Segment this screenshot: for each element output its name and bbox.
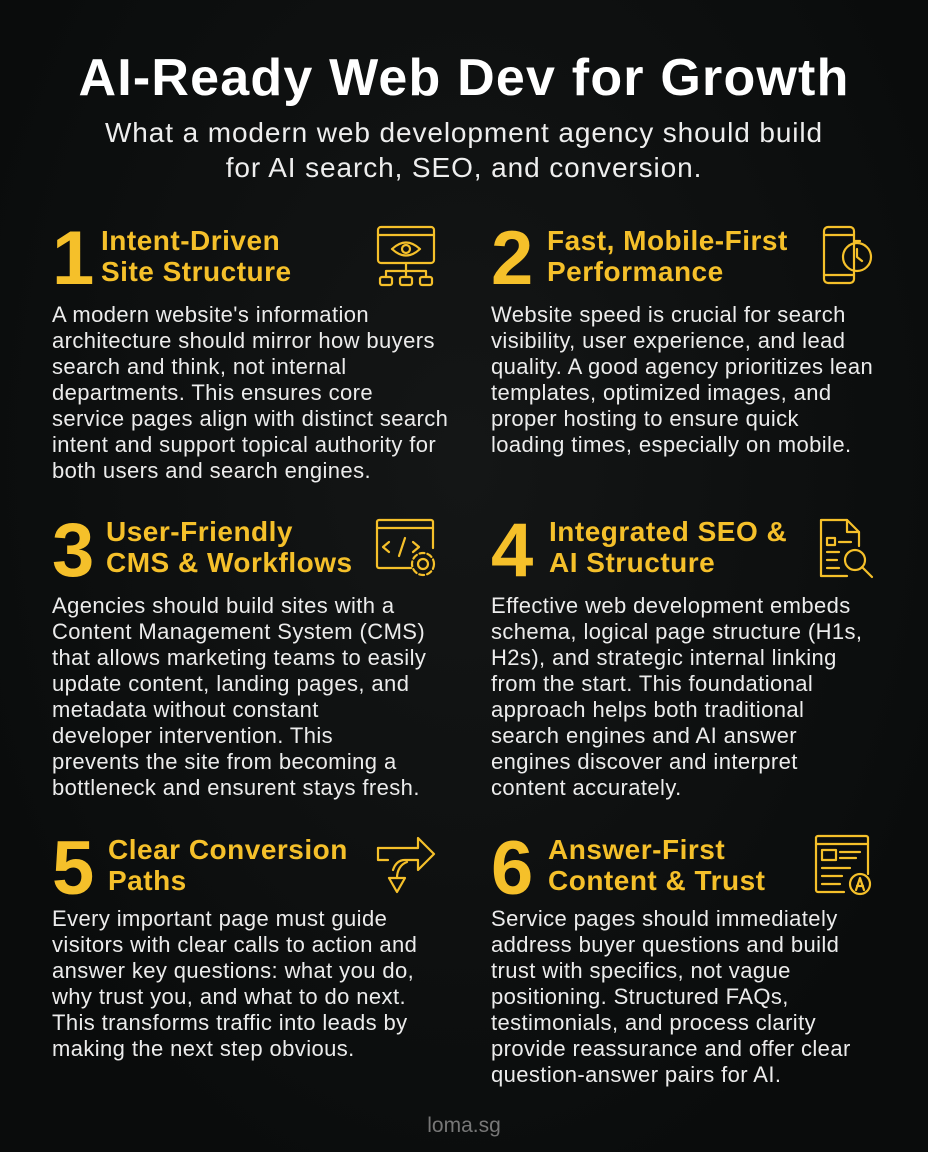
body 3: Content Management System (CMS) [52,619,425,644]
body 5: answer key questions: what you do, [52,958,414,983]
heading 6: Answer-First [548,834,725,865]
body 5: Every important page must guide [52,906,387,931]
body 4: from the start. This foundational [491,671,813,696]
body 6: positioning. Structured FAQs, [491,984,789,1009]
number 2: 2 [491,216,533,301]
heading 6 [548,834,766,896]
body 3: that allows marketing teams to easily [52,645,426,670]
body 5 [52,906,417,1061]
heading 5: Paths [108,865,187,896]
subtitle: for AI search, SEO, and conversion. [226,152,702,183]
body 1: service pages align with distinct search [52,406,448,431]
body 3 [52,593,426,800]
body 2: Website speed is crucial for search [491,302,846,327]
panel: 3 [52,508,436,800]
panel: 1 [52,216,448,483]
body 4: Effective web development embeds [491,593,851,618]
body 5: This transforms traffic into leads by [52,1010,408,1035]
number 5: 5 [52,826,94,911]
number 6: 6 [491,826,533,911]
body 6: Service pages should immediately [491,906,838,931]
body 5: why trust you, and what to do next. [52,984,406,1009]
body 1: both users and search engines. [52,458,371,483]
icon: split arrows [376,836,436,894]
body 2: visibility, user experience, and lead [491,328,845,353]
body 3: metadata without constant [52,697,319,722]
footer: loma.sg [427,1114,501,1137]
title: AI-Ready Web Dev for Growth [78,49,850,107]
panel: 2 [491,216,873,457]
body 4: engines discover and interpret [491,749,798,774]
icon: phone stopwatch [822,226,872,284]
heading 2: Performance [547,256,724,287]
body 3: prevents the site from becoming a [52,749,397,774]
number 1: 1 [52,216,94,301]
body 3: developer intervention. This [52,723,333,748]
body 6: provide reassurance and offer clear [491,1036,851,1061]
heading 3: User-Friendly [106,516,293,547]
body 1: departments. This ensures core [52,380,373,405]
body 1: architecture should mirror how buyers [52,328,435,353]
number 3: 3 [52,508,94,593]
body 5: making the next step obvious. [52,1036,355,1061]
heading 3: CMS & Workflows [106,547,353,578]
icon: page with A [814,834,872,896]
body 2: templates, optimized images, and [491,380,832,405]
body 2: loading times, especially on mobile. [491,432,851,457]
icon: code window gear [376,518,436,576]
body 4 [491,593,862,800]
body 4: H2s), and strategic internal linking [491,645,837,670]
heading 4: Integrated SEO & [549,516,787,547]
body 2: proper hosting to ensure quick [491,406,799,431]
body 4: content accurately. [491,775,682,800]
subtitle: What a modern web development agency should build [105,117,823,148]
heading 1 [101,225,292,287]
body 6: question-answer pairs for AI. [491,1062,781,1087]
body 6: address buyer questions and build [491,932,839,957]
body 1: A modern website's information [52,302,369,327]
panel: 6 [491,826,872,1087]
icon: document magnifier [820,518,874,578]
heading 6: Content & Trust [548,865,766,896]
panel: 5 [52,826,436,1061]
heading 1: Intent-Driven [101,225,280,256]
icon: browser eye sitemap [376,226,436,286]
heading 4 [549,516,787,578]
body 3: update content, landing pages, and [52,671,409,696]
body 6: trust with specifics, not vague [491,958,791,983]
subtitle [105,117,823,183]
heading 5: Clear Conversion [108,834,348,865]
body 4: schema, logical page structure (H1s, [491,619,862,644]
body 2: quality. A good agency prioritizes lean [491,354,873,379]
body 4: approach helps both traditional [491,697,804,722]
heading 2 [547,225,788,287]
body 2 [491,302,873,457]
panel: 4 [491,508,874,800]
heading 3 [106,516,353,578]
heading 5 [108,834,348,896]
body 6: testimonials, and process clarity [491,1010,816,1035]
body 4: search engines and AI answer [491,723,797,748]
number 4: 4 [491,508,533,593]
heading 4: AI Structure [549,547,715,578]
body 6 [491,906,851,1087]
body 1: intent and support topical authority for [52,432,436,457]
body 5: visitors with clear calls to action and [52,932,417,957]
body 3: bottleneck and ensurent stays fresh. [52,775,420,800]
heading 1: Site Structure [101,256,292,287]
heading 2: Fast, Mobile-First [547,225,788,256]
body 3: Agencies should build sites with a [52,593,395,618]
body 1: search and think, not internal [52,354,347,379]
body 1 [52,302,448,483]
